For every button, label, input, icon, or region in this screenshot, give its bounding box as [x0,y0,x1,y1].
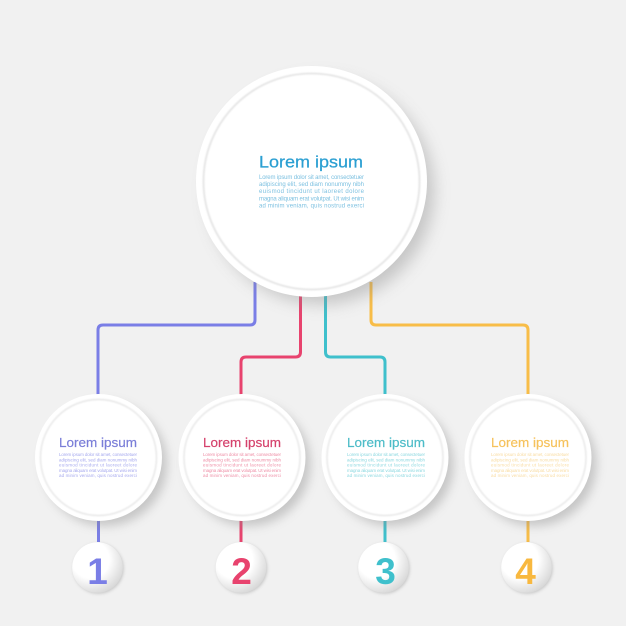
text block: circle 4 body: euismod tincidunt ut laoreet dolore [491,463,569,468]
badge: number 2: 2 [231,551,252,592]
text block: circle 1 body: magna aliquam erat volutpat. Ut wisi enim [59,468,137,473]
text block: circle 4 body: magna aliquam erat volutpat. Ut wisi enim [491,468,569,473]
badge: number 4 [501,542,552,594]
connector: yellow stem [526,520,530,542]
heading: main title: Lorem ipsum [259,152,363,172]
text block: circle 3 body: Lorem ipsum dolor sit amet, consectetuer [347,452,426,457]
text block: circle 4 body: Lorem ipsum dolor sit amet, consectetuer [491,452,570,457]
connector: red stem [240,520,242,542]
heading: circle 1 title: Lorem ipsum [59,435,137,450]
panel: main circle [196,66,434,304]
connector: blue line [98,282,255,396]
text block: circle 2 body: Lorem ipsum dolor sit amet, consectetuer [203,452,282,457]
heading: circle 2 title: Lorem ipsum [203,435,281,450]
panel: circle 3 [322,394,454,526]
connector: yellow line [371,282,528,396]
text block: circle 1 body: ad minim veniam, quis nostrud exerci [59,473,137,478]
text block: circle 3 body: magna aliquam erat volutpat. Ut wisi enim [347,468,425,473]
badge: number 3 [358,542,410,594]
heading: circle 4 title: Lorem ipsum [491,435,569,450]
text block: main body: adipiscing elit, sed diam nonummy nibh [259,182,364,188]
badge: number 4: 4 [515,551,536,592]
badge: number 1: 1 [87,551,108,592]
text block: circle 3 body: adipiscing elit, sed diam nonummy nibh [347,457,425,462]
text block: circle 4 body: adipiscing elit, sed diam nonummy nibh [491,457,569,462]
text block: circle 1 body: Lorem ipsum dolor sit amet, consectetuer [59,452,138,457]
heading: circle 3 title: Lorem ipsum [347,435,425,450]
text block: circle 2 body: ad minim veniam, quis nostrud exerci [203,473,281,478]
text block: main body: Lorem ipsum dolor sit amet, consectetuer [259,175,364,181]
text block: circle 1 body: adipiscing elit, sed diam nonummy nibh [59,457,137,462]
badge: number 2 [216,542,267,594]
text block: circle 4 body: ad minim veniam, quis nostrud exerci [491,473,569,478]
connector: blue stem [97,520,100,542]
badge: number 1 [72,542,124,594]
connector: teal stem [384,520,386,542]
text block: main body: magna aliquam erat volutpat. Ut wisi enim [259,196,364,202]
connector: teal line [326,296,385,396]
panel: circle 1 [35,394,167,526]
text block: circle 3 body: ad minim veniam, quis nostrud exerci [347,473,425,478]
panel: circle 2 [178,394,310,526]
text block: circle 2 body [203,452,282,478]
badge: number 3: 3 [375,551,396,592]
text block: circle 2 body: euismod tincidunt ut laoreet dolore [203,463,281,468]
text block: circle 2 body: magna aliquam erat volutpat. Ut wisi enim [203,468,281,473]
connector: red line [241,296,300,396]
text block: circle 1 body: euismod tincidunt ut laoreet dolore [59,463,137,468]
text block: circle 1 body [59,452,138,478]
text block: main body: euismod tincidunt ut laoreet dolore [259,189,365,195]
text block: main body [259,175,365,209]
text block: circle 2 body: adipiscing elit, sed diam nonummy nibh [203,457,281,462]
text block: circle 3 body [347,452,426,478]
panel: circle 4 [464,394,596,526]
text block: circle 3 body: euismod tincidunt ut laoreet dolore [347,463,425,468]
text block: circle 4 body [491,452,570,478]
text block: main body: ad minim veniam, quis nostrud exerci [259,203,364,209]
